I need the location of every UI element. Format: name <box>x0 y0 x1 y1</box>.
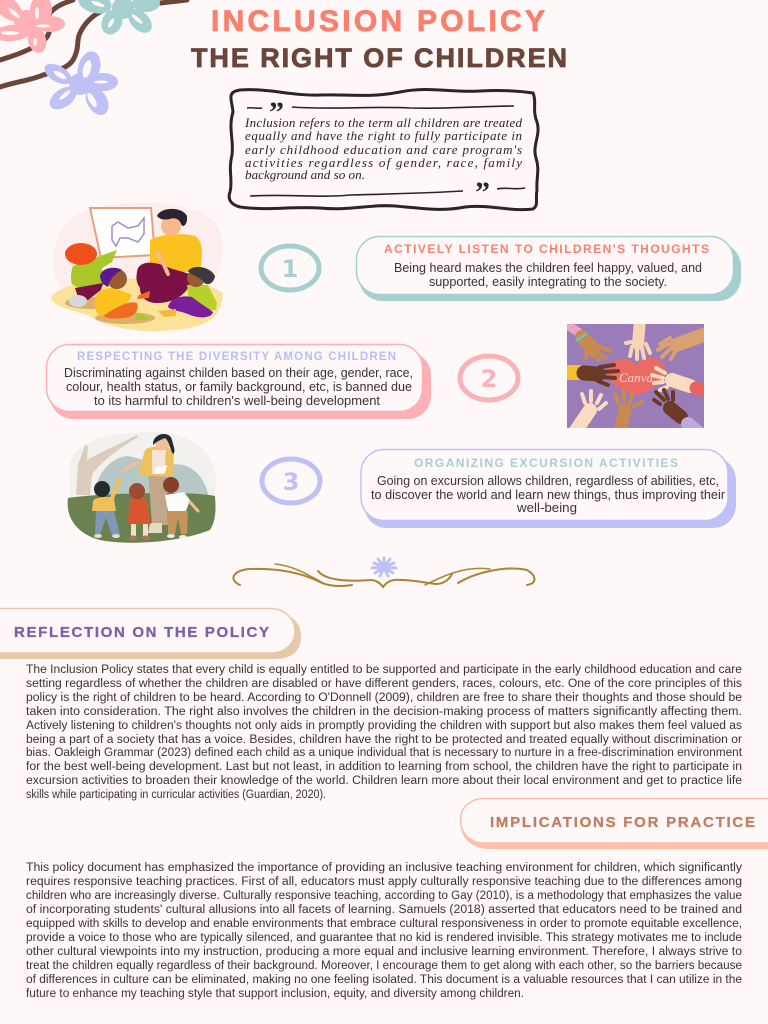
tree <box>76 435 138 495</box>
hand bottom left <box>575 391 606 432</box>
heading: RESPECTING THE DIVERSITY AMONG CHILDREN <box>77 351 396 363</box>
heart <box>608 358 665 396</box>
heading: ORGANIZING EXCURSION ACTIVITIES <box>414 456 678 470</box>
number badge 3 <box>262 459 320 503</box>
quote text: activities regardless of gender, race, family <box>245 155 522 170</box>
ground <box>68 493 215 543</box>
icon: teal flower <box>76 0 160 38</box>
quote text: early childhood education and care program's <box>245 142 522 157</box>
body text: to discover the world and learn new things, thus improving their <box>371 488 725 502</box>
callout: definition quote box <box>229 90 538 210</box>
text block: reflection paragraph: setting regardless of whether the children are disabled or have different genders, races, colours, etc. One of the core principles of this <box>26 678 742 690</box>
text block: implications paragraph: of differences in culture can be eliminated, making no one feeling isolated. This document is a valuable resources that I can utilize in the <box>26 974 742 986</box>
hand right <box>652 368 708 390</box>
hand top right <box>658 334 706 359</box>
panel: actively listen <box>356 236 741 301</box>
heading: ACTIVELY LISTEN TO CHILDREN'S THOUGHTS <box>384 242 709 256</box>
text block: reflection paragraph: bias. Oakleigh Grammar (2023) defined each child as a unique individual that is necessary to nurture in a free-discrimination environment <box>26 747 743 759</box>
child: purple hair <box>95 268 150 320</box>
quote text: background and so on. <box>245 167 365 182</box>
text block: implications paragraph: treat the children equally regardless of their background. Moreover, I encourage them to get along with each other, so the barriers because <box>26 960 742 972</box>
illustration: diverse hands around a heart <box>567 324 704 428</box>
heading tab: reflection on the policy: REFLECTION ON THE POLICY <box>14 624 269 641</box>
text block: reflection paragraph: excursion activities to broaden their knowledge of the world. Children learn more about their local environment and get to practice life <box>26 775 742 787</box>
hand bottom middle <box>615 390 642 432</box>
panel: excursion activities <box>361 450 736 528</box>
ornament: gold swirl divider with flower <box>233 558 535 587</box>
text block: reflection paragraph: policy is the right of children to be heard. According to O'Donnell (2009), children are free to share their thoughts and those should be <box>26 692 742 704</box>
text block: implications paragraph: children who are increasingly diverse. Culturally responsive teaching, according to Gay (2010), is a methodology that emphasizes the value <box>26 890 742 902</box>
title: Inclusion Policy: INCLUSION POLICY <box>211 5 545 38</box>
text block: reflection paragraph: skills while participating in curricular activities (Guardian, 2020). <box>26 789 326 801</box>
body text: supported, easily integrating to the society. <box>429 275 667 289</box>
body text: well-being <box>516 501 577 515</box>
subtitle: The Right of Children: THE RIGHT OF CHILDREN <box>191 43 567 73</box>
hand bottom right <box>654 390 700 434</box>
body text: Discriminating against childen based on their age, gender, race, <box>64 366 413 380</box>
text block: implications paragraph: other cultural viewpoints into my instruction, producing a more equal and inclusive learning environment. Therefore, I always strive to <box>26 946 742 958</box>
icon: lilac flower <box>41 49 118 119</box>
teacher <box>124 434 175 533</box>
text block: reflection paragraph: Actively listening to children's thoughts not only aids in promptly providing the children with support but also makes them feel valued as <box>26 720 742 732</box>
quote text: Inclusion refers to the term all children are treated <box>244 115 522 130</box>
text block: implications paragraph: future to enhance my teaching style that support inclusion, equity, and diversity among children. <box>26 988 524 1000</box>
illustration: diverse hands around a heart: Canva <box>619 370 653 385</box>
heading tab: implications for practice: IMPLICATIONS FOR PRACTICE <box>490 814 755 831</box>
bushes <box>95 456 210 498</box>
child: red hair <box>65 243 117 307</box>
number badge 3: 3 <box>283 468 299 496</box>
icon: opening quote mark: ” <box>269 96 284 129</box>
text block: reflection paragraph: taken into consideration. The right also involves the children in the decision-making process of matters significantly affecting them. <box>26 706 742 718</box>
child: green shirt <box>158 267 217 317</box>
text block: implications paragraph: provide a voice to those who are typically silenced, and guarantee that no kid is rendered invisible. This strategy motivates me to include <box>26 932 742 944</box>
heading tab: implications for practice <box>460 798 768 849</box>
number badge 2: 2 <box>481 365 497 393</box>
icon: lilac flower burst <box>372 558 396 576</box>
text block: reflection paragraph: The Inclusion Policy states that every child is equally entitled to be supported and participate in the early childhood education and care <box>26 664 742 676</box>
body text: Going on excursion allows children, regardless of abilities, etc, <box>377 474 719 488</box>
quote text <box>244 115 522 182</box>
icon: closing quote mark: ” <box>475 176 490 209</box>
panel: respecting diversity <box>46 344 431 419</box>
body text: to its harmful to children's well-being development <box>94 394 381 408</box>
text block: implications paragraph: requires responsive teaching practices. First of all, educators must apply culturally responsive teaching due to the differences among <box>26 876 742 888</box>
child middle <box>127 483 151 540</box>
child right <box>163 477 198 539</box>
text block: reflection paragraph <box>26 664 743 801</box>
number badge 1: 1 <box>282 255 298 283</box>
heading tab: reflection on the policy <box>0 608 301 659</box>
board <box>90 208 155 258</box>
body text <box>371 474 725 515</box>
illustration: teacher and children on an excursion <box>68 432 216 543</box>
teacher <box>136 209 202 303</box>
number badge 1 <box>261 246 319 290</box>
quote text: equally and have the right to fully participate in <box>245 128 522 143</box>
text block: implications paragraph: equipped with skills to develop and enable environments that embrace cultural responsiveness in order to promote equitable excellence, <box>26 918 742 930</box>
illustration: teacher and children at a board <box>51 203 223 331</box>
text block: implications paragraph <box>26 862 742 1000</box>
hand top left <box>566 324 610 360</box>
text block: implications paragraph: This policy document has emphasized the importance of providing an inclusive teaching environment for children, which significantly <box>26 862 742 874</box>
decoration: branches and flowers <box>0 0 187 119</box>
text block: reflection paragraph: being a part of a society that has a voice. Besides, children have the right to be protected and treated equally without discrimination or <box>26 734 742 746</box>
hand top <box>626 320 650 359</box>
text block: implications paragraph: of incorporating students' cultural allusions into all facets of learning. Samuels (2018) asserted that educators need to be trained and <box>26 904 742 916</box>
body text <box>64 366 413 408</box>
body text <box>394 261 702 289</box>
child left <box>92 479 120 538</box>
body text: colour, health status, or family background, etc, is banned due <box>66 380 412 394</box>
icon: pink flower <box>0 0 65 55</box>
number badge 2 <box>460 356 518 400</box>
text block: reflection paragraph: for the best well-being development. Last but not least, in addition to learning from school, the children have the right to participate in <box>26 761 742 773</box>
body text: Being heard makes the children feel happy, valued, and <box>394 261 702 275</box>
hand left <box>567 365 618 385</box>
